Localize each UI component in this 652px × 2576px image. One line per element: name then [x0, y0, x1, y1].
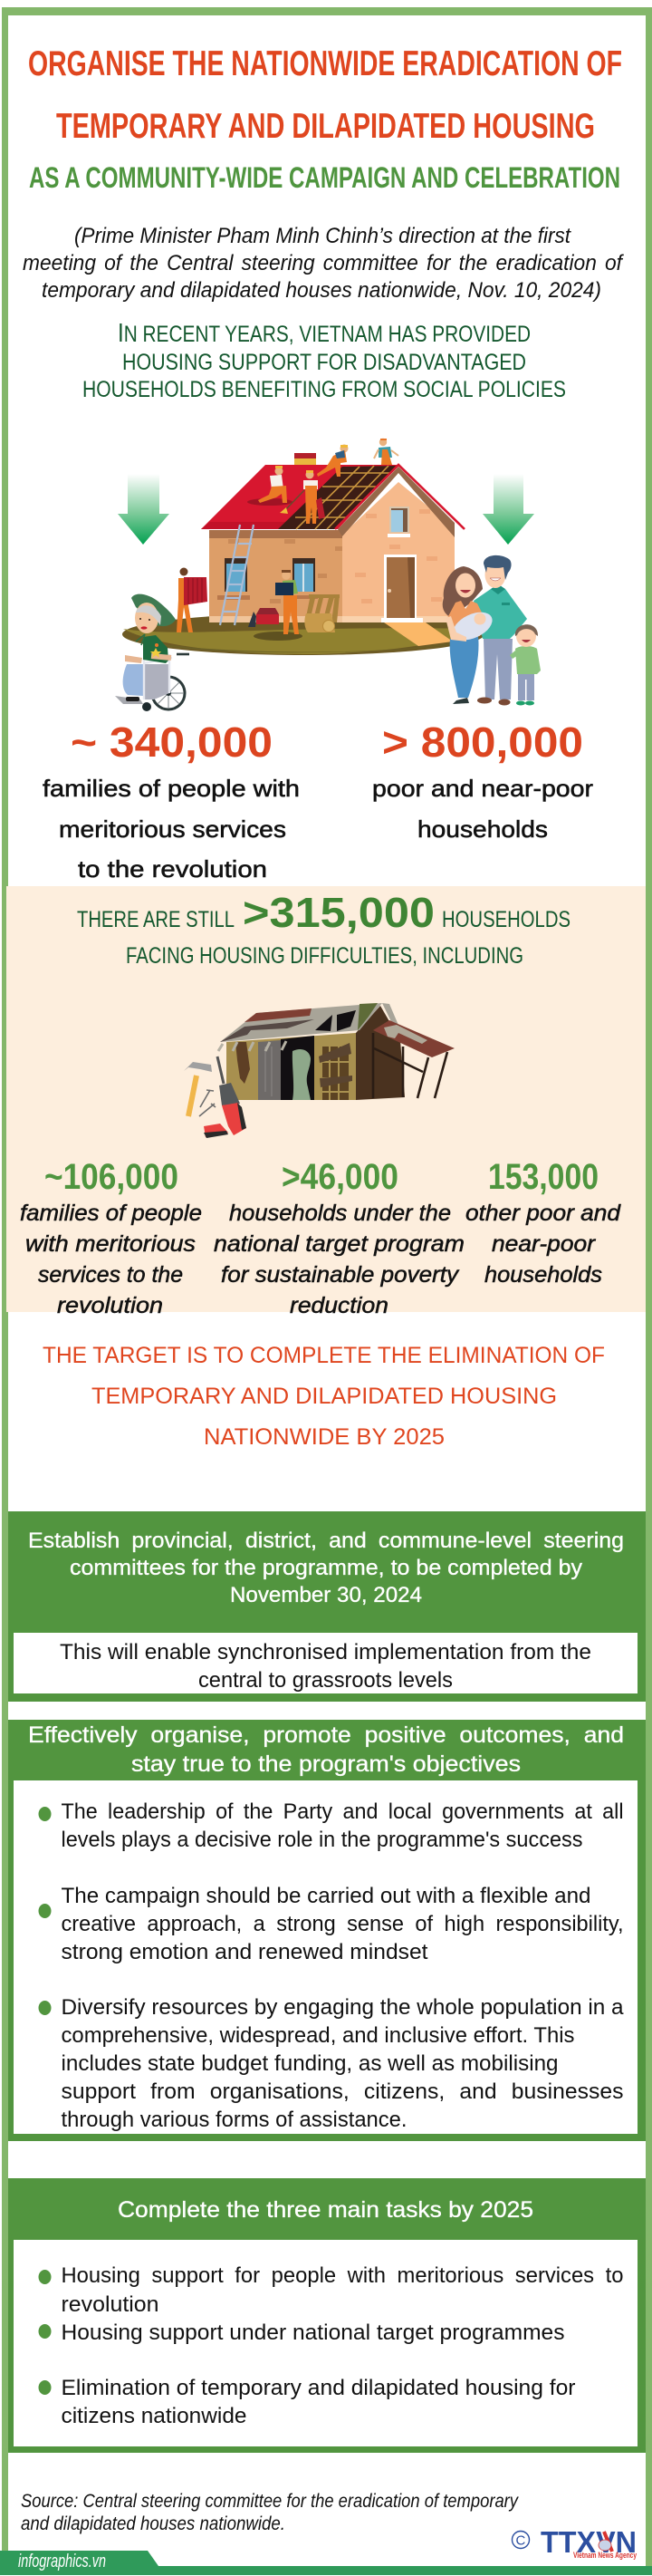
source note: [21, 2491, 519, 2534]
stat column: 106,000: revolution: [57, 1293, 163, 1318]
bullet: diversify resources: through various forms of assistance.: [62, 2108, 408, 2132]
stat column: 46,000: national target program: [214, 1231, 465, 1257]
panel heading: committees for the programme, to be completed by: [70, 1556, 582, 1580]
stat column: 46,000: for sustainable poverty: [221, 1262, 460, 1288]
intro heading: [82, 319, 566, 402]
quote attribution: [23, 224, 624, 303]
panel heading: November 30, 2024: [230, 1583, 422, 1607]
panel: three main tasks: [8, 2178, 646, 2453]
target statement: TEMPORARY AND DILAPIDATED HOUSING: [91, 1384, 557, 1409]
bullet: meritorious services: [38, 2263, 623, 2317]
logo: TTXVN: C: [516, 2533, 525, 2548]
worker standing on roof: [280, 470, 325, 524]
intro heading: HOUSING SUPPORT FOR DISADVANTAGED: [122, 350, 526, 375]
stat label: households: households: [417, 815, 548, 843]
panel: organise effectively: [8, 1720, 646, 2141]
stat column: 153,000: households: [484, 1262, 602, 1288]
illustration: house under repair: [122, 439, 484, 655]
icon: drill: [204, 1056, 246, 1138]
bullet: campaign approach: The campaign should be carried out with a flexible and: [62, 1884, 590, 1908]
worker on upper roof: [317, 444, 348, 477]
stat column: 46,000: households under the: [229, 1201, 451, 1226]
bullet: diversify resources: [38, 1995, 624, 2132]
bullet: elimination: Elimination of temporary and dilapidated housing for: [62, 2376, 575, 2400]
intro heading: HOUSEHOLDS BENEFITING FROM SOCIAL POLICIES: [82, 377, 566, 402]
stat column: 46,000: [214, 1157, 465, 1318]
stat label: families: [43, 775, 300, 883]
stat column: 153,000: 153,000: [488, 1157, 599, 1197]
bullet: diversify resources: includes state budget funding, as well as mobilising: [62, 2051, 558, 2076]
target statement: THE TARGET IS TO COMPLETE THE ELIMINATION OF: [43, 1343, 605, 1368]
icon: hammer: [184, 1062, 212, 1116]
source note: and dilapidated houses nationwide.: [21, 2513, 285, 2534]
panel heading: Complete the three main tasks by 2025: [118, 2197, 533, 2223]
worker carrying roofing sheet: [177, 567, 207, 632]
panel: steering committees: [8, 1511, 646, 1702]
stat column: 106,000: ~106,000: [44, 1157, 178, 1197]
panel heading: FACING HOUSING DIFFICULTIES, INCLUDING: [126, 943, 523, 969]
footer bar: [0, 2551, 652, 2575]
stat column: 46,000: >46,000: [282, 1157, 398, 1197]
icon: nails: [199, 1090, 216, 1116]
panel heading: Effectively organise, promote positive outcomes, and: [28, 1722, 624, 1748]
bullet: elimination: [38, 2376, 575, 2428]
worker at roof peak: [374, 439, 398, 465]
target statement: NATIONWIDE BY 2025: [204, 1424, 445, 1450]
panel heading: stay true to the program's objectives: [131, 1751, 521, 1777]
arrow: right: [483, 474, 534, 545]
panel heading: [28, 1529, 624, 1607]
panel heading: [77, 889, 570, 969]
worker kneeling on roof: [258, 466, 287, 503]
quote attribution: meeting of the Central steering committee for the eradication of: [23, 251, 624, 275]
stat column: 46,000: reduction: [290, 1293, 388, 1318]
bullet: meritorious services: revolution: [62, 2292, 159, 2317]
panel heading: Establish provincial, district, and commune-level steering: [28, 1529, 624, 1553]
stat label: families: to the revolution: [78, 855, 267, 883]
stat column: 106,000: [20, 1157, 202, 1318]
stat label: families: meritorious services: [59, 815, 286, 843]
quote attribution: temporary and dilapidated houses nationwide, Nov. 10, 2024): [42, 278, 601, 303]
illustration: veteran in wheelchair: [115, 594, 189, 711]
bullet: leadership: The leadership of the Party and local governments at all: [62, 1799, 623, 1824]
illustration: family: [443, 555, 541, 705]
bullet: diversify resources: comprehensive, widespread, and inclusive effort. This: [62, 2023, 574, 2048]
title: [28, 44, 622, 194]
bullet: elimination: citizens nationwide: [62, 2404, 246, 2428]
target statement: [43, 1343, 605, 1450]
worker holding box: [275, 570, 299, 634]
bullet: diversify resources: Diversify resources by engaging the whole population in a: [62, 1995, 624, 2020]
bullet: national target programmes: Housing support under national target programmes: [62, 2320, 565, 2345]
bullet: campaign approach: creative approach, a strong sense of high responsibility,: [62, 1912, 623, 1936]
panel: households facing difficulties: [6, 886, 646, 1318]
stat column: 153,000: other poor and: [465, 1201, 621, 1226]
panel heading: >315,000: [243, 889, 435, 936]
bullet: campaign approach: [38, 1884, 623, 1964]
stat label: families: families of people with: [43, 775, 300, 802]
intro heading: IN RECENT YEARS, VIETNAM HAS PROVIDED: [118, 319, 531, 348]
stat column: 106,000: services to the: [38, 1262, 183, 1288]
stat column: 153,000: near-poor: [492, 1231, 597, 1257]
bullet: leadership: levels plays a decisive role in the programme's success: [62, 1828, 583, 1852]
arrow: left: [118, 474, 169, 545]
stat column: 106,000: with meritorious: [25, 1231, 196, 1257]
bullet: diversify resources: support from organisations, citizens, and businesses: [62, 2079, 623, 2104]
panel heading: THERE ARE STILL: [77, 907, 235, 932]
stat: 800,000: > 800,000: [382, 719, 583, 766]
text box: This will enable synchronised implementation from the: [60, 1640, 591, 1664]
footer bar: infographics.vn: [18, 2552, 106, 2571]
source note: Source: Central steering committee for the eradication of temporary: [21, 2491, 519, 2512]
panel heading: [28, 1722, 624, 1777]
text box: central to grassroots levels: [198, 1668, 453, 1693]
stat label: households: poor and near-poor: [372, 775, 593, 802]
illustration: dilapidated shack: [184, 1003, 455, 1138]
stat label: households: [372, 775, 593, 843]
text box: [14, 1633, 638, 1693]
logo: TTXVN: TTXVN: [541, 2525, 637, 2559]
stat column: 106,000: families of people: [20, 1201, 202, 1226]
stat: 340,000: ~ 340,000: [71, 719, 273, 766]
bullet: leadership: [38, 1799, 623, 1852]
bullet: meritorious services: Housing support for people with meritorious services to: [62, 2263, 623, 2288]
bullet: campaign approach: strong emotion and renewed mindset: [62, 1940, 428, 1964]
quote attribution: (Prime Minister Pham Minh Chinh’s direction at the first: [74, 224, 571, 248]
panel heading: HOUSEHOLDS: [442, 907, 570, 932]
stat column: 153,000: [465, 1157, 621, 1288]
